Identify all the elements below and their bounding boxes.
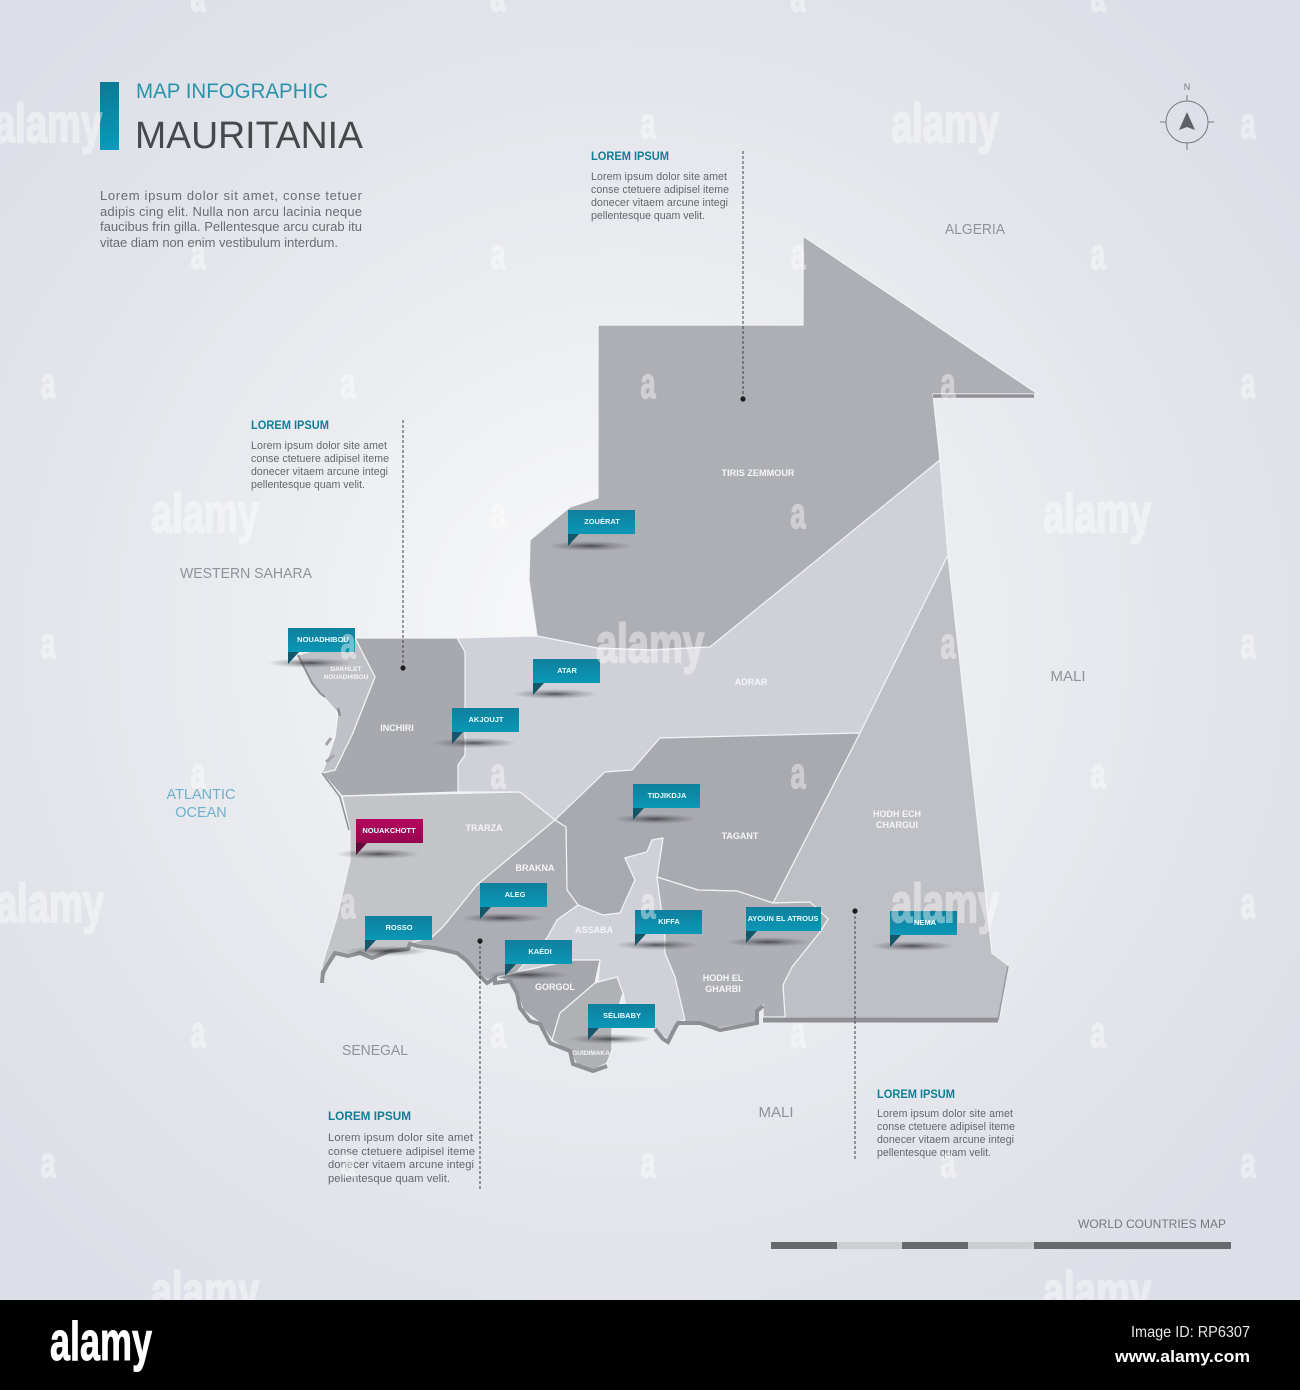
callout line: north — [740, 151, 746, 402]
region labels: CHARGUI — [876, 820, 918, 830]
callout text: north: conse ctetuere adipisel iteme — [591, 184, 729, 196]
subtitle: MAP INFOGRAPHIC — [136, 80, 328, 103]
pin: Nouakchott: NOUAKCHOTT — [362, 826, 416, 835]
watermark overlay: a — [190, 749, 206, 798]
region: Assaba — [517, 838, 685, 1040]
callout text: south-east: LOREM IPSUM — [877, 1087, 955, 1101]
pin: Nouadhibou — [268, 628, 355, 668]
pin: Nema: NEMA — [914, 918, 937, 927]
pin: Kiffa: KIFFA — [658, 917, 680, 926]
pin: Akjoujt — [432, 708, 519, 748]
region: Tagant — [555, 733, 860, 915]
callout text: west: conse ctetuere adipisel iteme — [251, 453, 389, 465]
callout line: south-east — [852, 908, 858, 1160]
watermark overlay: a — [40, 619, 56, 668]
region labels: NOUADHIBOU — [324, 674, 369, 681]
pin: Akjoujt: AKJOUJT — [468, 715, 504, 724]
callout text: west: Lorem ipsum dolor site amet — [251, 440, 387, 452]
watermark overlay: a — [1090, 230, 1106, 279]
pin: Nouakchott — [336, 819, 423, 859]
title: MAURITANIA — [135, 115, 364, 157]
pin: Rosso: ROSSO — [385, 923, 413, 932]
intro paragraph: vitae diam non enim vestibulum interdum. — [100, 235, 338, 250]
neighbouring country labels: MALI — [1050, 669, 1086, 685]
title block accent bar — [100, 82, 119, 150]
pin: Zouerat — [548, 510, 635, 551]
watermark overlay: alamy — [891, 92, 999, 154]
watermark overlay: alamy — [1043, 1260, 1151, 1322]
watermark overlay: a — [790, 230, 806, 279]
region: Adrar — [457, 460, 948, 820]
watermark overlay: a — [640, 879, 656, 928]
watermark overlay: a — [940, 359, 956, 408]
pin: Selibaby: SÉLIBABY — [603, 1011, 641, 1020]
callout text: south-east — [877, 1087, 1015, 1159]
callout text: north: donecer vitaem arcune integi — [591, 197, 728, 209]
callout text: north — [591, 149, 729, 222]
region: Trarza — [322, 792, 555, 983]
region: Hodh El Gharbi — [657, 877, 828, 1028]
region labels: GORGOL — [535, 982, 576, 992]
watermark overlay: a — [190, 230, 206, 279]
intro paragraph: faucibus frin gilla. Pellentesque arcu curab itu — [100, 219, 362, 234]
map of Mauritania — [298, 236, 1038, 1071]
callout text: south-west: conse ctetuere adipisel iteme — [328, 1146, 475, 1158]
watermark overlay: a — [790, 1008, 806, 1057]
watermark overlay: alamy — [151, 1260, 259, 1322]
pin: Ayoun el Atrous: AYOUN EL ATROUS — [748, 914, 818, 923]
pin: Aleg — [460, 883, 547, 923]
watermark overlay: a — [1090, 749, 1106, 798]
region: Hodh Ech Chargui — [763, 555, 1008, 1018]
pin: Aleg: ALEG — [505, 890, 526, 899]
callout text: south-east: conse ctetuere adipisel iteme — [877, 1121, 1015, 1133]
watermark overlay: alamy — [891, 872, 999, 934]
image id: Image ID: RP6307 — [1131, 1324, 1250, 1341]
footer logo: alamy — [50, 1310, 152, 1372]
watermark overlay: a — [490, 749, 506, 798]
watermark overlay: a — [1240, 1138, 1256, 1187]
callout text: south-east: Lorem ipsum dolor site amet — [877, 1108, 1013, 1120]
region labels: HODH ECH — [873, 809, 921, 819]
watermark overlay: alamy — [596, 612, 704, 674]
pin: Atar: ATAR — [557, 666, 577, 675]
scale bar — [771, 1242, 1231, 1249]
region labels: HODH EL — [703, 973, 744, 983]
website: www.alamy.com — [1114, 1347, 1250, 1366]
watermark overlay: a — [340, 879, 356, 928]
callout text: west: pellentesque quam velit. — [251, 479, 365, 491]
watermark overlay: a — [790, 749, 806, 798]
watermark overlay: a — [490, 1008, 506, 1057]
3D coastal edge — [298, 396, 1034, 1071]
intro paragraph: adipis cing elit. Nulla non arcu lacinia neque — [100, 204, 362, 219]
callout text: south-east: donecer vitaem arcune integi — [877, 1134, 1014, 1146]
region labels: GUIDIMAKA — [572, 1050, 610, 1057]
watermark overlay: alamy — [1043, 482, 1151, 544]
scale bar caption: WORLD COUNTRIES MAP — [1078, 1217, 1226, 1231]
icon: compass: N — [1184, 82, 1190, 92]
pin: Nouadhibou: NOUADHIBOU — [297, 635, 349, 644]
callout text: south-west — [328, 1109, 475, 1185]
watermark overlay: a — [640, 359, 656, 408]
region: Brakna — [410, 820, 578, 980]
callout text: north: pellentesque quam velit. — [591, 210, 705, 222]
watermark overlay: a — [340, 1138, 356, 1187]
callout text: west — [251, 418, 389, 491]
callout line: south-west — [477, 938, 483, 1190]
footer band — [0, 1300, 1300, 1390]
intro paragraph — [100, 188, 363, 250]
callout text: west: LOREM IPSUM — [251, 418, 329, 432]
region: Dakhlet Nouadhibou — [298, 638, 375, 773]
watermark overlay: a — [1240, 879, 1256, 928]
neighbouring country labels: ATLANTIC — [166, 787, 236, 803]
watermark overlay: a — [1240, 619, 1256, 668]
callout line: west — [400, 420, 406, 671]
neighbouring country labels: SENEGAL — [342, 1043, 408, 1059]
watermark overlay: a — [340, 359, 356, 408]
pin: Kiffa — [615, 910, 702, 950]
regions — [298, 236, 1038, 1070]
region labels: GHARBI — [705, 984, 741, 994]
intro paragraph: Lorem ipsum dolor sit amet, conse tetuer — [100, 188, 363, 203]
neighbouring country labels: WESTERN SAHARA — [180, 566, 312, 582]
region: Tiris Zemmour — [529, 236, 1038, 650]
callout text: north: Lorem ipsum dolor site amet — [591, 171, 727, 183]
watermark overlay: a — [340, 619, 356, 668]
region: Inchiri — [322, 638, 465, 796]
pin: Tidjikdja: TIDJIKDJA — [648, 791, 687, 800]
pin: Kaedi — [485, 940, 572, 980]
pin: Zouerat: ZOUÉRAT — [584, 517, 620, 526]
region labels: DAKHLET — [330, 666, 362, 673]
watermark overlay: a — [490, 489, 506, 538]
region: Guidimaka — [552, 977, 623, 1070]
watermark overlay: a — [40, 359, 56, 408]
watermark overlay: a — [190, 1008, 206, 1057]
region labels: ASSABA — [575, 925, 613, 935]
pin: Atar — [513, 659, 600, 699]
region labels — [324, 468, 921, 1057]
region labels: TRARZA — [466, 823, 503, 833]
watermark overlay: a — [940, 1138, 956, 1187]
watermark overlay: a — [1240, 359, 1256, 408]
watermark overlay: a — [940, 619, 956, 668]
watermark overlay: a — [40, 1138, 56, 1187]
icon: compass — [1160, 82, 1214, 150]
callout text: south-west: donecer vitaem arcune integi — [328, 1159, 474, 1171]
watermark overlay: a — [790, 489, 806, 538]
neighbouring country labels: ALGERIA — [945, 222, 1005, 238]
callout text: south-west: Lorem ipsum dolor site amet — [328, 1132, 474, 1144]
neighbouring country labels: OCEAN — [175, 805, 227, 821]
watermark overlay: a — [490, 230, 506, 279]
region labels: TAGANT — [722, 831, 759, 841]
neighbouring country labels — [166, 222, 1086, 1121]
pin: Ayoun el Atrous — [726, 907, 821, 947]
watermark overlay: alamy — [151, 482, 259, 544]
watermark overlay: alamy — [0, 872, 104, 934]
neighbouring country labels: MALI — [758, 1105, 794, 1121]
pin: Rosso — [345, 916, 432, 956]
pin: Nema — [870, 911, 957, 951]
callout text: south-east: pellentesque quam velit. — [877, 1147, 991, 1159]
pin: Tidjikdja — [613, 784, 700, 824]
callout text: south-west: pellentesque quam velit. — [328, 1173, 450, 1185]
watermark overlay: a — [640, 99, 656, 148]
callout text: west: donecer vitaem arcune integi — [251, 466, 388, 478]
pin: Kaedi: KAÉDI — [528, 947, 552, 956]
watermark overlay: a — [640, 1138, 656, 1187]
pin: Selibaby — [568, 1004, 655, 1044]
region: Gorgol — [495, 960, 600, 1040]
callout text: south-west: LOREM IPSUM — [328, 1109, 411, 1123]
region labels: ADRAR — [735, 677, 768, 687]
watermark overlay: a — [1090, 1008, 1106, 1057]
region labels: TIRIS ZEMMOUR — [722, 468, 795, 478]
region labels: INCHIRI — [380, 723, 414, 733]
region labels: BRAKNA — [516, 863, 555, 873]
watermark overlay: a — [1240, 99, 1256, 148]
callout text: north: LOREM IPSUM — [591, 149, 669, 163]
